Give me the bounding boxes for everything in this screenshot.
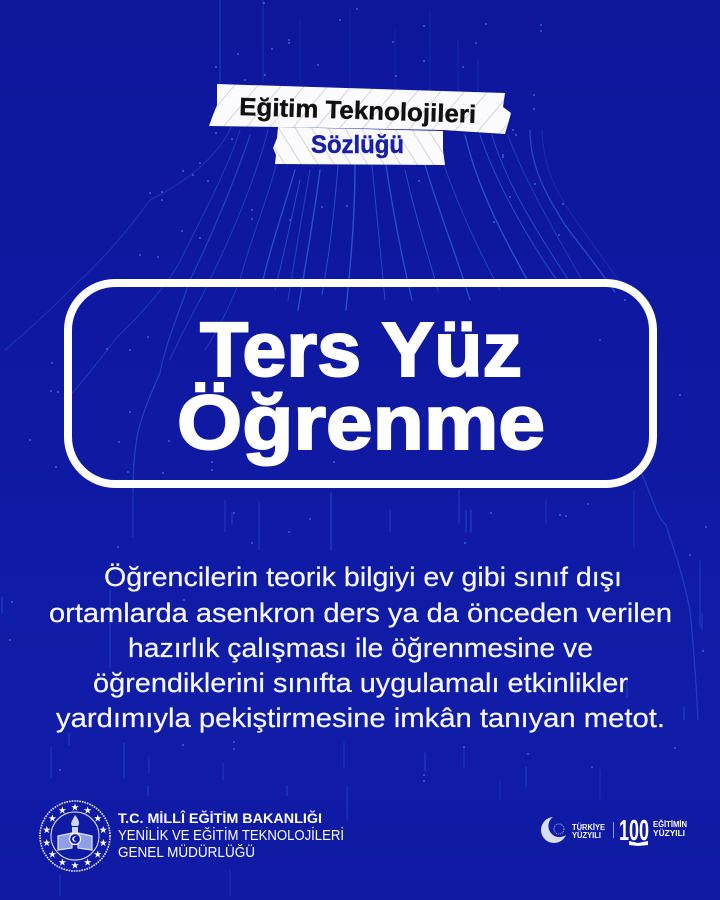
icon: ministry seal: ★	[48, 850, 56, 859]
icon: ministry seal: ★	[58, 858, 66, 867]
icon: ministry seal: ★	[71, 861, 79, 870]
icon: ministry seal: ★	[99, 826, 107, 834]
body text: öğrendiklerini sınıfta uygulamalı etkinlikler	[93, 668, 628, 698]
logo: Türkiye Yüzyılı	[541, 817, 606, 843]
icon: ministry seal: ★	[43, 838, 51, 848]
logo: Türkiye Yüzyılı: YÜZYILI	[572, 831, 601, 840]
body text: yardımıyla pekiştirmesine imkân tanıyan metot.	[56, 703, 665, 733]
body text: Öğrencilerin teorik bilgiyi ev gibi sınıf dışı	[104, 562, 622, 592]
logo: 100 Eğitimin Yüzyılı	[613, 815, 687, 847]
body text: ortamlarda asenkron ders ya da önceden verilen	[49, 598, 672, 628]
badge: Eğitim Teknolojileri Sözlüğü	[209, 84, 511, 165]
logo: Türkiye Yüzyılı: TÜRKİYE	[572, 823, 606, 832]
ministry name: T.C. MİLLÎ EĞİTİM BAKANLIĞI	[118, 809, 322, 826]
icon: ministry seal: ★	[99, 838, 107, 848]
title text	[177, 307, 545, 466]
icon: ministry seal: ★	[58, 806, 66, 815]
logo: 100 Eğitimin Yüzyılı: EĞİTİMİN	[653, 820, 687, 829]
title panel: Ters Yüz Öğrenme	[68, 283, 653, 484]
logo: 100 Eğitimin Yüzyılı: YÜZYILI	[653, 829, 685, 838]
body text	[49, 562, 672, 733]
title frame	[68, 283, 653, 484]
tape: Sözlüğü	[273, 127, 445, 165]
icon: ministry seal: ★	[84, 806, 92, 815]
icon: ministry seal	[40, 801, 110, 871]
title text: Öğrenme	[177, 380, 545, 466]
ministry name	[118, 809, 344, 861]
tape: Sözlüğü: Sözlüğü	[311, 131, 404, 159]
icon: ministry seal: ★	[94, 850, 102, 859]
icon: ministry seal: ★	[94, 814, 102, 823]
icon: ministry seal: ★	[43, 826, 51, 834]
ministry name: GENEL MÜDÜRLÜĞÜ	[118, 843, 255, 861]
title text: Ters Yüz	[200, 307, 522, 393]
icon: ministry seal: ★	[48, 814, 56, 823]
tape: Eğitim Teknolojileri	[209, 84, 511, 134]
logo: 100 Eğitimin Yüzyılı: 100	[619, 815, 649, 847]
body text: hazırlık çalışması ile öğrenmesine ve	[128, 633, 593, 663]
icon: ministry seal: ★	[71, 803, 79, 812]
tape: Eğitim Teknolojileri: Eğitim Teknolojileri	[239, 93, 477, 129]
icon: ministry seal: ★	[84, 858, 92, 867]
ministry name: YENİLİK VE EĞİTİM TEKNOLOJİLERİ	[118, 826, 344, 844]
